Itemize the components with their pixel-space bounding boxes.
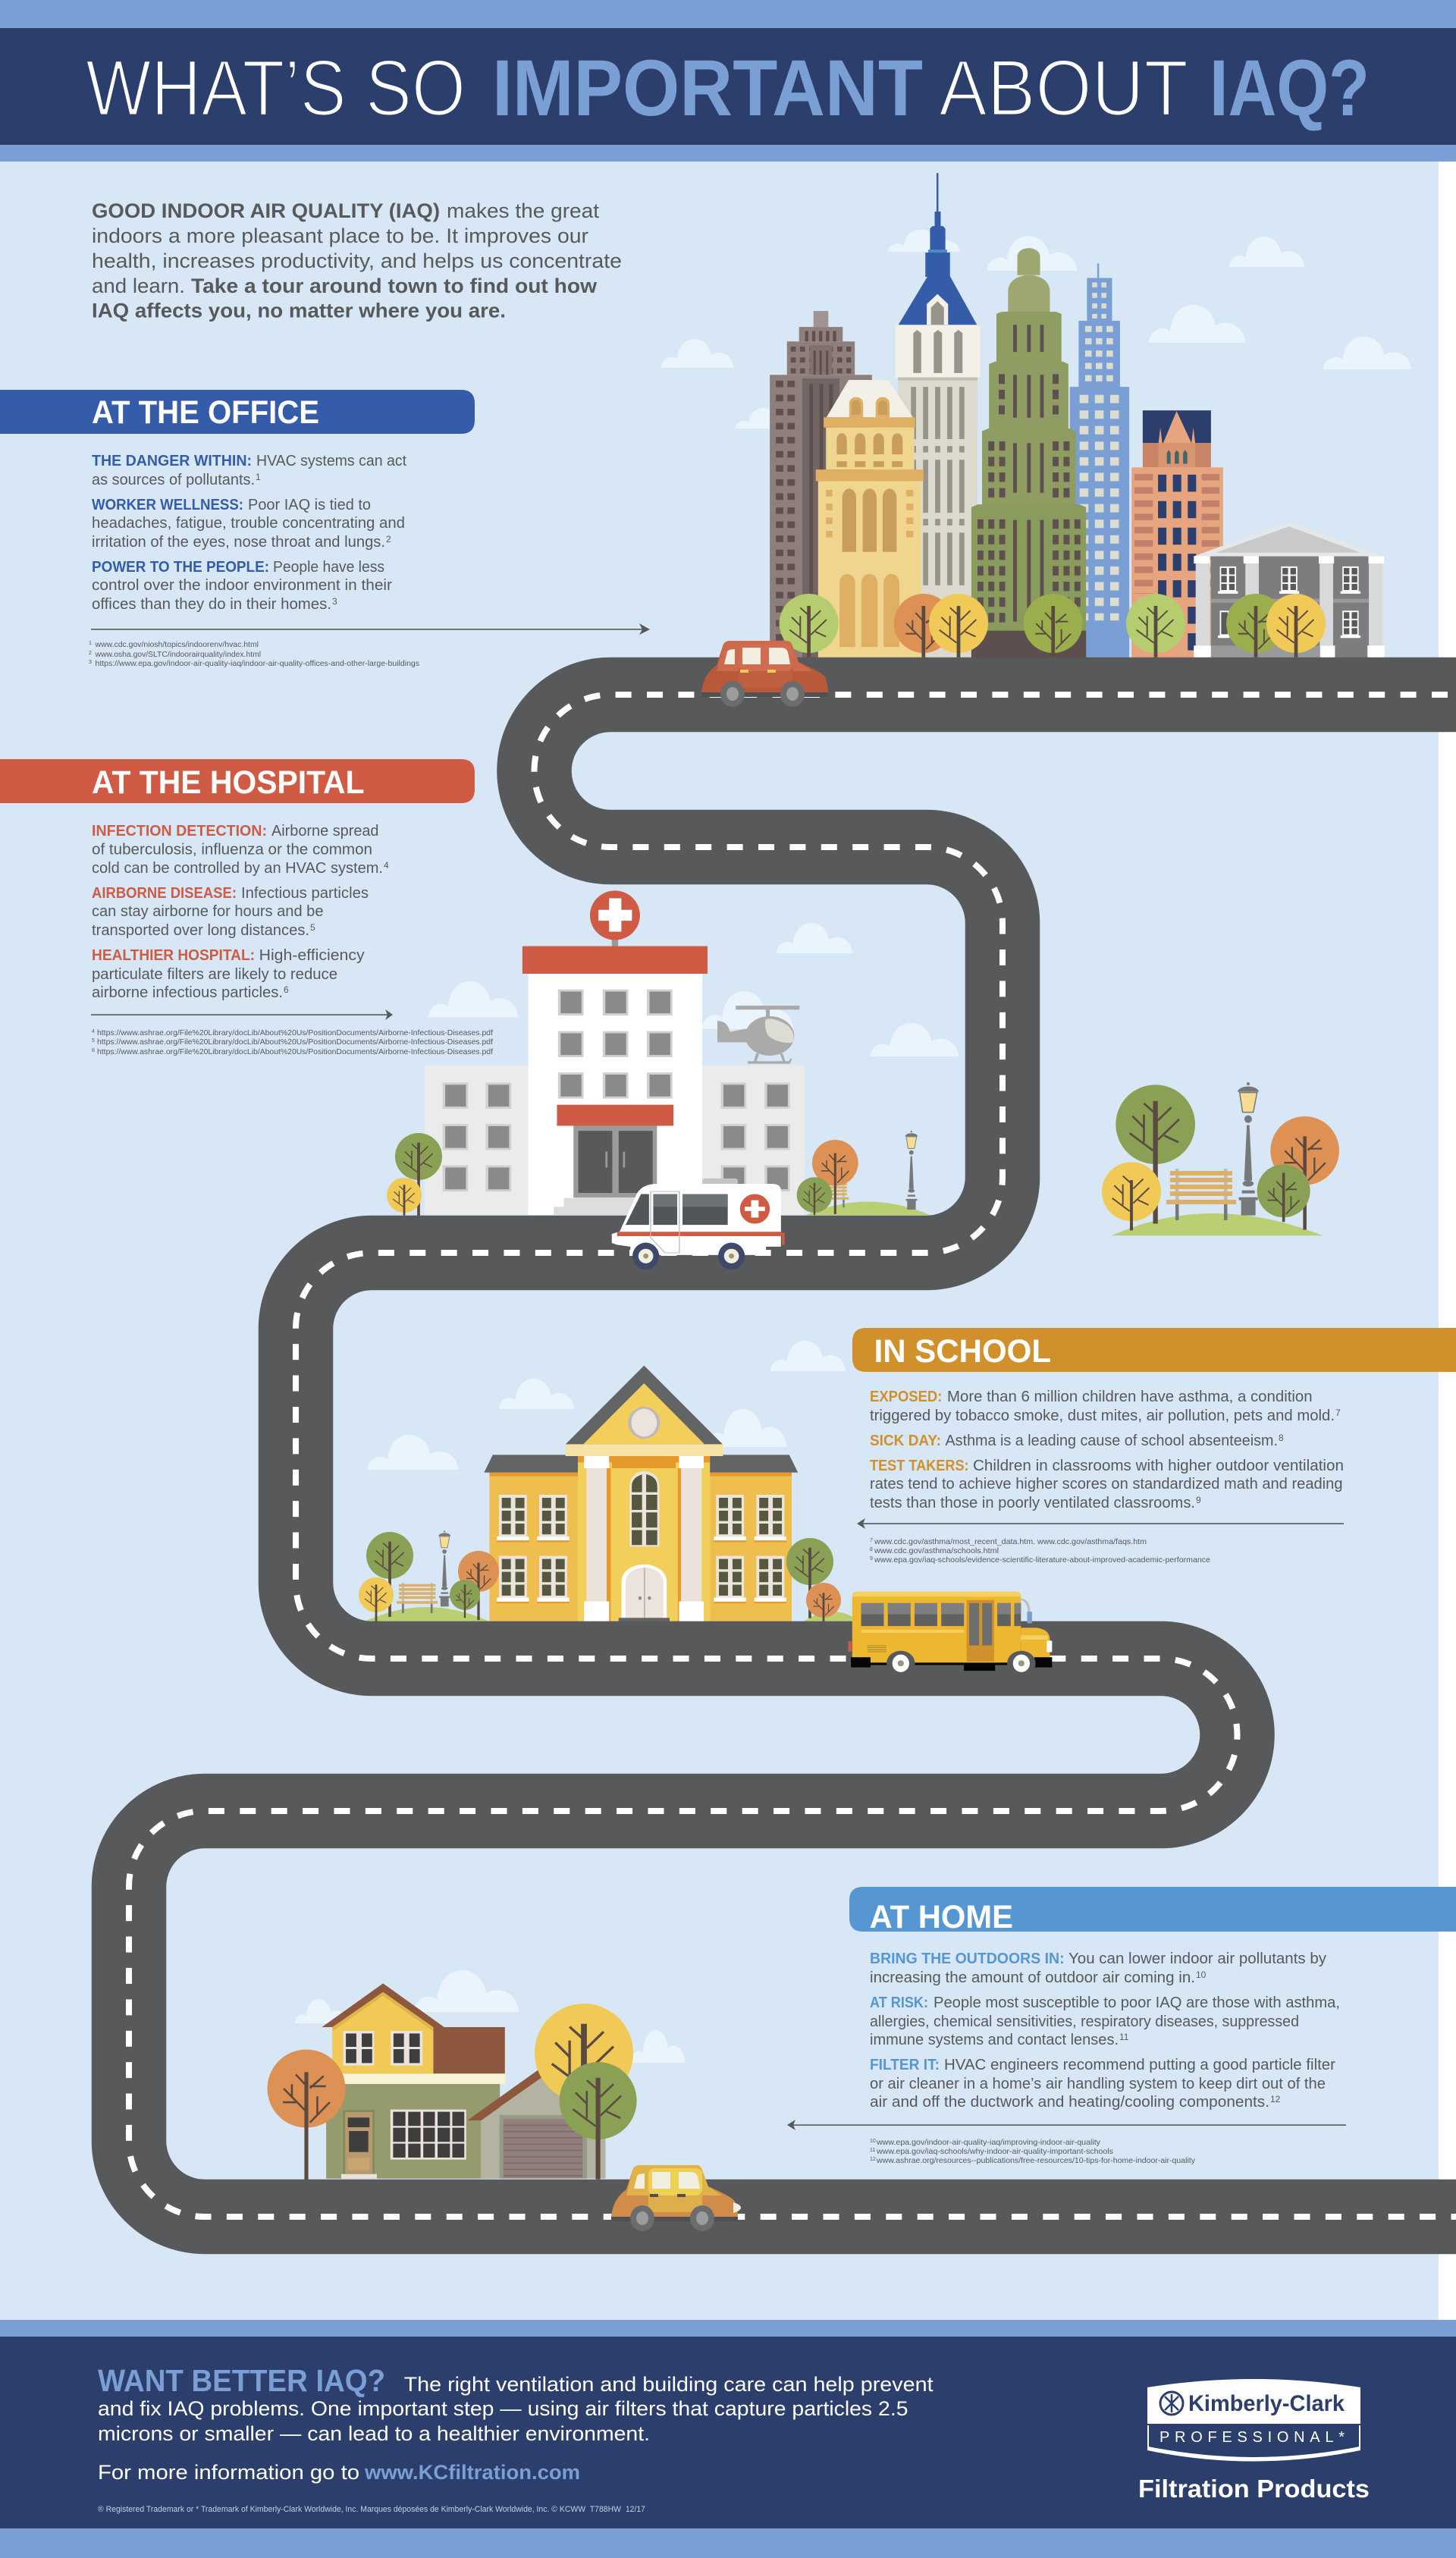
school sources: 8 [870,1547,873,1552]
hospital text: INFECTION DETECTION: [92,823,267,840]
heading: at home [849,1887,1456,1935]
hospital text: transported over long distances. [92,922,309,939]
hospital text: Airborne spread [271,823,379,840]
panel: at the office [0,390,650,668]
hospital text: AIRBORNE DISEASE: [92,885,237,902]
hospital text: cold can be controlled by an HVAC system. [92,860,383,877]
home sources: 11 [870,2148,875,2153]
road [129,695,1456,2217]
home text: People most susceptible to poor IAQ are those with asthma, [934,1995,1340,2011]
school sources: 9 [870,1556,873,1561]
footer [0,2320,1456,2558]
lower storey [326,2084,500,2179]
hospital text: Infectious particles [241,885,369,902]
home text: BRING THE OUTDOORS IN: [870,1951,1065,1967]
school text: rates tend to achieve higher scores on standardized math and reading [870,1476,1342,1492]
heading: at the hospital: AT THE HOSPITAL [92,764,364,801]
school text: 8 [1279,1433,1284,1443]
office text: People have less [273,559,384,576]
hospital text: airborne infectious particles. [92,984,283,1001]
call to action text: WANT BETTER IAQ? [98,2363,385,2398]
school centre [566,1366,723,1621]
arrow [91,1009,393,1020]
arrow [857,1518,1344,1529]
office text: 1 [256,472,261,482]
home sources: www.ashrae.org/resources--publications/free-resources/10-tips-for-home-indoor-air-quality [876,2156,1196,2165]
intro paragraph: makes the great [447,199,600,222]
title [86,44,1370,133]
office text: 3 [332,596,337,607]
school text: More than 6 million children have asthma, a condition [947,1389,1313,1405]
school sources: www.cdc.gov/asthma/schools.html [874,1546,999,1555]
office text: WORKER WELLNESS: [92,497,243,513]
bank [1194,522,1385,658]
school [365,1366,861,1621]
title banner [0,0,1456,162]
home text: air and off the ductwork and heating/cooling components. [870,2094,1269,2111]
intro paragraph: Take a tour around town to find out how [191,275,598,297]
school bus [849,1592,1052,1676]
office text: Poor IAQ is tied to [248,497,371,513]
office text [92,453,406,613]
hospital sources: https://www.ashrae.org/File%20Library/docLib/About%20Us/PositionDocuments/Airborne-Infectious-Diseases.pdf [97,1037,493,1047]
city skyline [770,173,1385,658]
school sources: 7 [870,1538,873,1543]
school text: triggered by tobacco smoke, dust mites, air pollution, pets and mold. [870,1408,1335,1424]
heading: in school [852,1328,1456,1372]
school text: SICK DAY: [870,1433,941,1449]
title: IMPORTANT [492,44,923,133]
office text: HVAC systems can act [256,453,406,469]
call to action text: microns or smaller — can lead to a healthier environment. [98,2422,650,2445]
call to action text: The right ventilation and building care can help prevent [404,2373,934,2396]
home text [870,1951,1340,2111]
heading: at the office: AT THE OFFICE [92,394,319,431]
logo: Kimberly-Clark Professional [1147,2379,1360,2462]
yellow car [611,2165,741,2231]
hospital text: HEALTHIER HOSPITAL: [92,947,255,964]
hospital sources: 5 [92,1038,95,1044]
home text: You can lower indoor air pollutants by [1068,1951,1326,1967]
office sources: www.osha.gov/SLTC/indoorairquality/index.html [95,650,261,659]
home text: allergies, chemical sensitivities, respiratory diseases, suppressed [870,2013,1299,2030]
arrow [787,2120,1346,2130]
hospital text: 5 [310,922,315,933]
office text: irritation of the eyes, nose throat and lungs. [92,534,385,551]
hospital sources: https://www.ashrae.org/File%20Library/docLib/About%20Us/PositionDocuments/Airborne-Infectious-Diseases.pdf [97,1028,493,1037]
school text: 7 [1335,1408,1341,1418]
hospital sources: 6 [92,1048,95,1053]
house trees [267,2004,637,2180]
hospital text: of tuberculosis, influenza or the common [92,842,372,858]
office text: POWER TO THE PEOPLE: [92,559,269,576]
call to action text: and fix IAQ problems. One important step — using air filters that capture particles 2.5 [98,2397,908,2420]
home text: increasing the amount of outdoor air coming in. [870,1970,1195,1986]
large park [1102,1082,1339,1235]
home sources: www.epa.gov/indoor-air-quality-iaq/improving-indoor-air-quality [876,2138,1101,2147]
office sources: 1 [89,641,92,646]
cream tower with blue spire [895,173,981,658]
office text: 2 [386,534,391,545]
logo: Kimberly-Clark Professional: Kimberly-Clark [1188,2391,1345,2416]
office text: as sources of pollutants. [92,472,255,488]
home text: FILTER IT: [870,2057,940,2073]
call to action text [98,2363,934,2484]
arrow [91,623,650,635]
upper storey [322,1983,505,2084]
home text: HVAC engineers recommend putting a good particle filter [944,2057,1335,2073]
hospital text: 4 [384,860,389,871]
office sources: 3 [89,660,92,665]
home text: 11 [1119,2032,1129,2042]
blue tower [1070,263,1129,658]
office text: headaches, fatigue, trouble concentrating and [92,515,405,532]
intro paragraph: and learn. [92,275,185,297]
filtration products: Filtration Products [1138,2475,1370,2503]
school text: tests than those in poorly ventilated classrooms. [870,1495,1195,1511]
school text: Children in classrooms with higher outdoor ventilation [973,1458,1344,1474]
home text: AT RISK: [870,1995,928,2011]
heading: at the office [0,390,475,434]
ambulance [612,1179,785,1270]
hospital-side trees [387,1133,442,1216]
call to action text: www.KCfiltration.com [364,2461,580,2484]
hospital text: 6 [284,984,289,995]
home sources [870,2138,1196,2165]
logo: Kimberly-Clark Professional: PROFESSIONAL* [1159,2429,1345,2446]
garage [467,2067,605,2179]
intro paragraph: GOOD INDOOR AIR QUALITY (IAQ) [92,199,440,222]
hospital [425,890,805,1215]
house [322,1983,605,2179]
red car [701,641,828,707]
helicopter [717,1006,799,1064]
call to action text: For more information go to [98,2461,359,2484]
title: WHAT’S SO [86,44,466,133]
school text: TEST TAKERS: [870,1458,969,1474]
home text: immune systems and contact lenses. [870,2032,1119,2048]
school text: EXPOSED: [870,1389,942,1405]
title: ABOUT [939,44,1188,133]
home text: 12 [1270,2094,1281,2104]
panel: at home [787,1887,1456,2165]
heading: at the hospital [0,759,475,803]
home sources: 10 [870,2139,876,2144]
intro paragraph [92,199,622,322]
hospital sources: 4 [92,1029,95,1034]
home sources: 12 [870,2157,876,2162]
office sources: https://www.epa.gov/indoor-air-quality-iaq/indoor-air-quality-offices-and-other-large-buildings [96,659,419,668]
office text: THE DANGER WITHIN: [92,453,252,469]
panel: in school [852,1328,1456,1565]
office sources [89,640,419,668]
brown tower [770,311,872,658]
home text: or air cleaner in a home’s air handling system to keep dirt out of the [870,2076,1326,2092]
clouds [295,230,1411,2063]
office sources: 2 [89,651,92,656]
intro paragraph: indoors a more pleasant place to be. It improves our [92,224,588,247]
school sources: www.epa.gov/iaq-schools/evidence-scientific-literature-about-improved-academic-performance [874,1555,1210,1565]
hospital-side park [797,1131,930,1215]
school sources: www.cdc.gov/asthma/most_recent_data.htm. www.cdc.gov/asthma/faqs.htm [874,1537,1147,1546]
school text: Asthma is a leading cause of school absenteeism. [945,1433,1278,1449]
hospital text: particulate filters are likely to reduce [92,966,337,983]
school-side trees and bench [359,1530,841,1622]
hospital text: High-efficiency [259,947,365,964]
intro paragraph: IAQ affects you, no matter where you are. [92,299,506,322]
heading: in school: IN SCHOOL [874,1333,1051,1370]
school wings [484,1455,798,1621]
office text: control over the indoor environment in their [92,577,392,594]
home sources: www.epa.gov/iaq-schools/why-indoor-air-quality-important-schools [876,2147,1113,2156]
panel: at the hospital [0,759,493,1056]
legal line: ® Registered Trademark or * Trademark of Kimberly-Clark Worldwide, Inc. Marques déposées de Kimberly-Clark Worldwide, Inc. © KCWW T788HW 12/17 [98,2505,645,2514]
title: IAQ? [1210,44,1370,133]
office text: offices than they do in their homes. [92,596,331,613]
green tower [971,248,1086,658]
city trees [780,594,1326,658]
home text: 10 [1196,1970,1207,1980]
intro paragraph: health, increases productivity, and helps us concentrate [92,250,622,272]
hospital text: can stay airborne for hours and be [92,903,323,920]
hospital sources [92,1028,493,1056]
office sources: www.cdc.gov/niosh/topics/indoorenv/hvac.html [95,640,259,649]
heading: at home: AT HOME [870,1899,1013,1935]
school grounds [365,1607,861,1621]
brick tower [1131,410,1223,658]
yellow building [816,380,924,658]
hospital sources: https://www.ashrae.org/File%20Library/docLib/About%20Us/PositionDocuments/Airborne-Infectious-Diseases.pdf [97,1047,493,1056]
school text: 9 [1196,1495,1201,1505]
hospital text [92,823,389,1001]
school sources [870,1537,1210,1565]
school text [870,1389,1344,1511]
